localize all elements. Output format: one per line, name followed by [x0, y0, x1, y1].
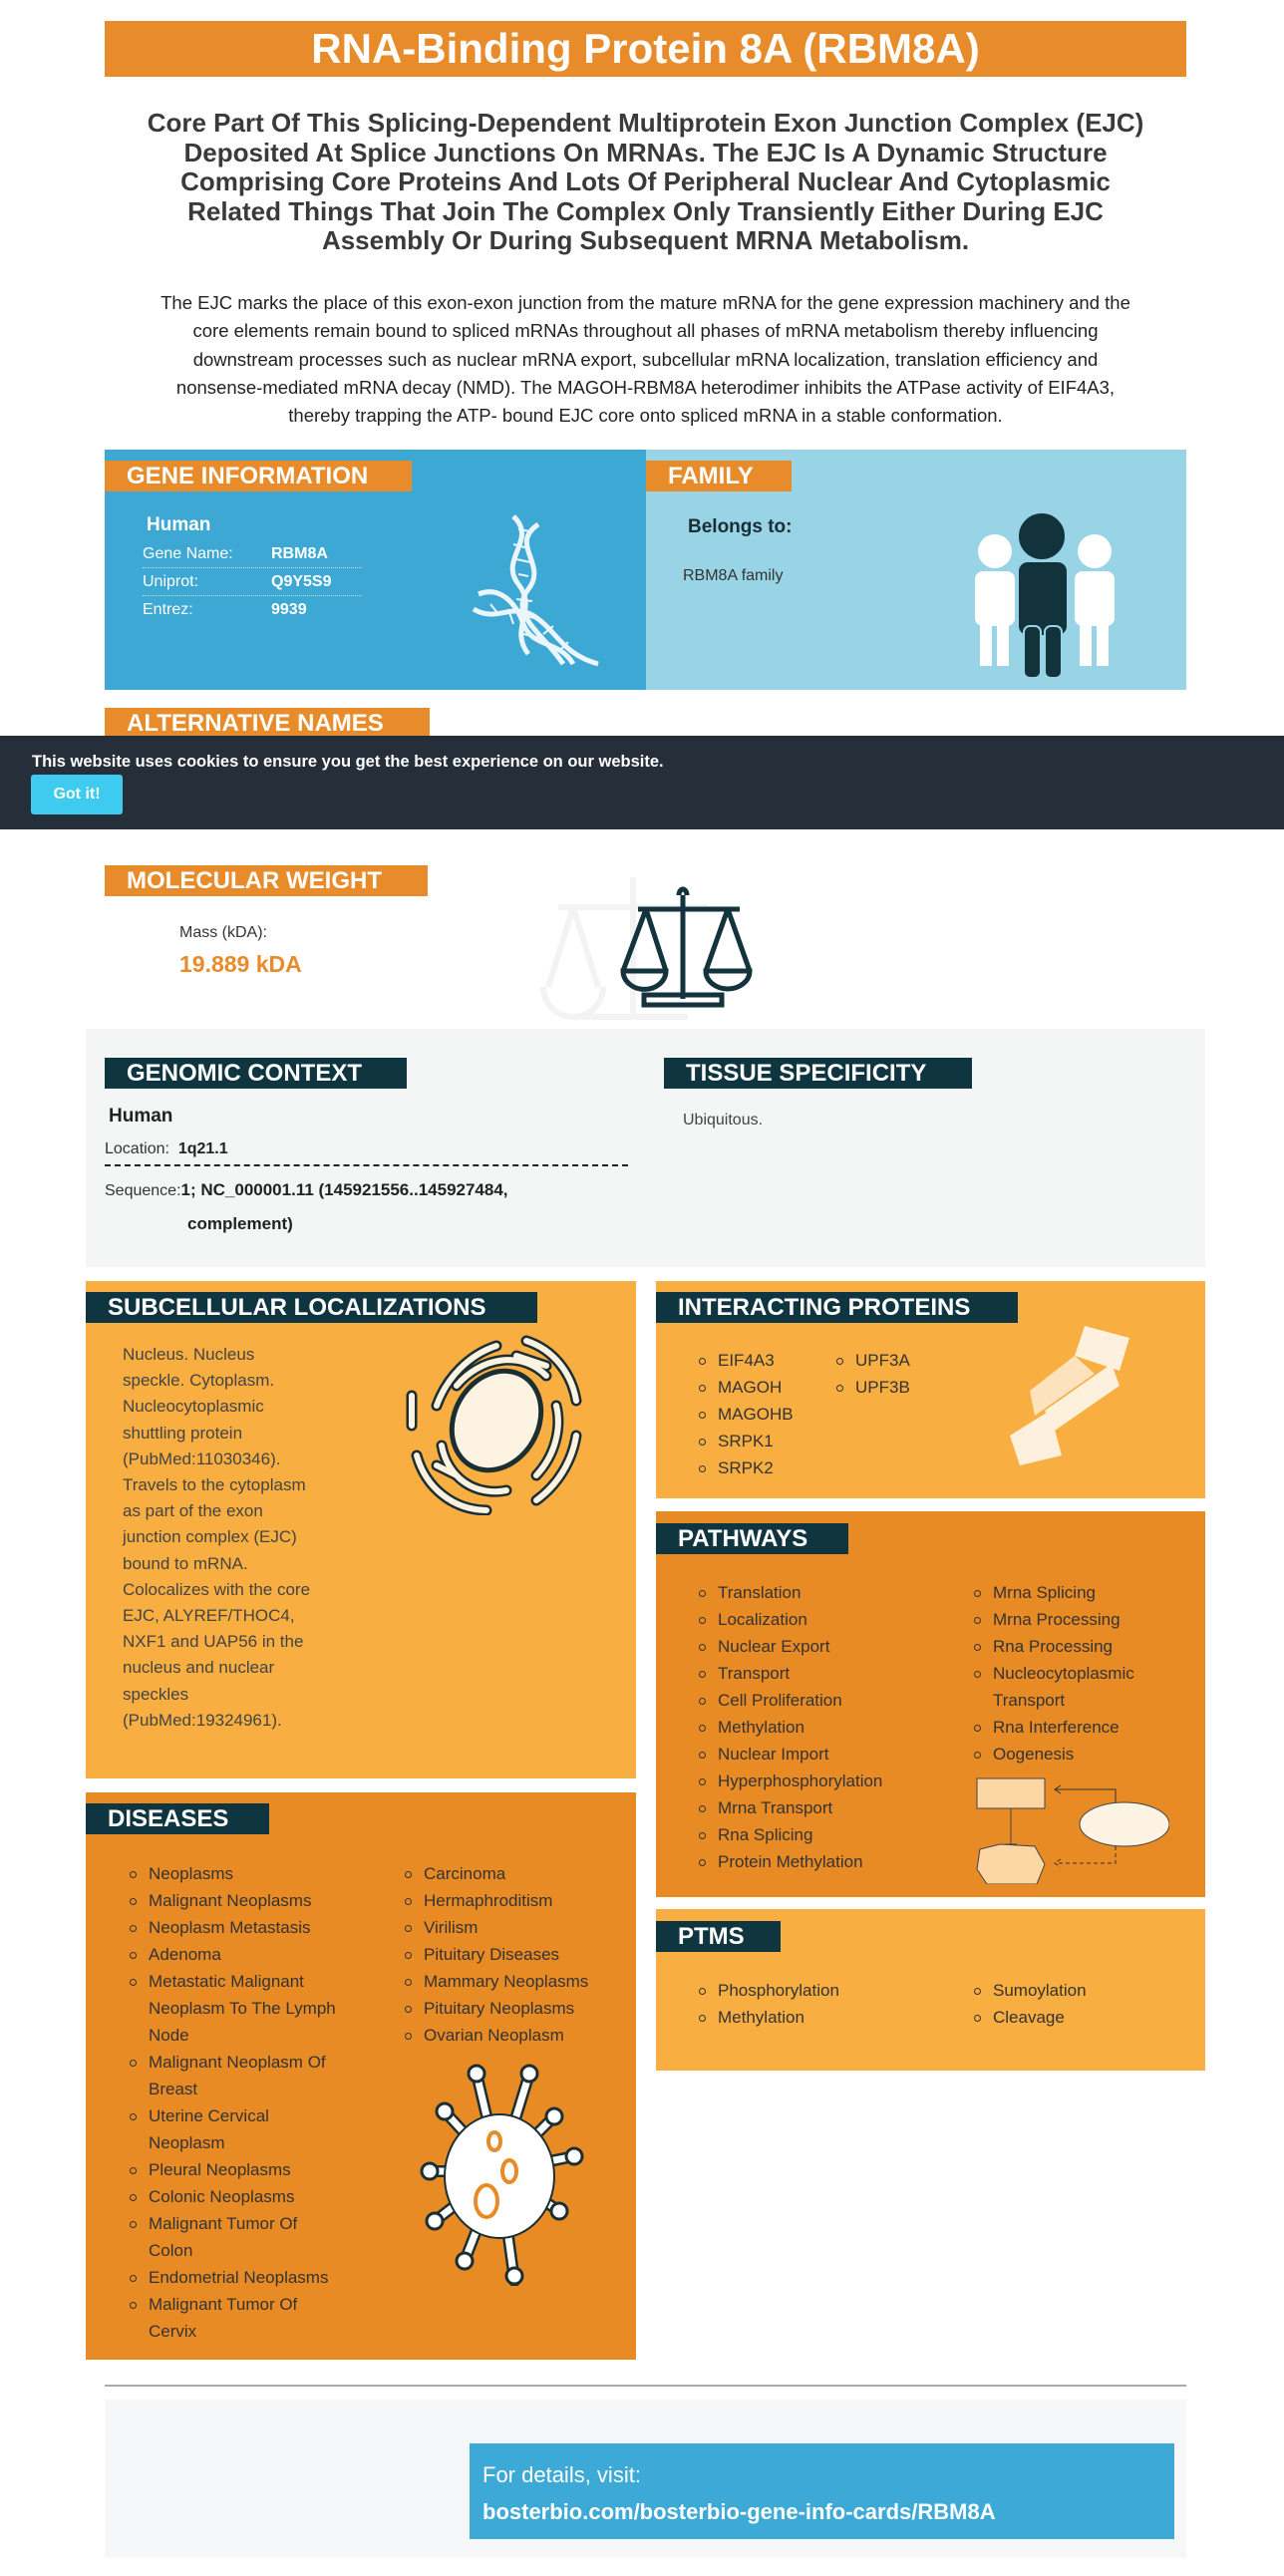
localization text — [122, 1345, 310, 1730]
mass block: 19.889 kDA — [179, 951, 302, 977]
disease list col 2: Mammary Neoplasms — [424, 1972, 588, 1991]
disease list col 1: Cervix — [149, 2322, 196, 2341]
family name: RBM8A family — [683, 567, 783, 584]
gene info table: 9939 — [271, 601, 307, 618]
genomic details: Sequence:1; NC_000001.11 (145921556..145927484, — [105, 1180, 508, 1199]
subtitle: Comprising Core Proteins And Lots Of Peripheral Nuclear And Cytoplasmic — [180, 166, 1111, 196]
protein list col 2 — [836, 1351, 910, 1397]
title — [105, 21, 1186, 77]
pathway list col 1: Cell Proliferation — [718, 1691, 842, 1710]
heading: ptms: PTMS — [678, 1923, 745, 1950]
disease list col 2: Pituitary Diseases — [424, 1945, 559, 1964]
gene info table: Q9Y5S9 — [271, 573, 331, 590]
description paragraph: thereby trapping the ATP- bound EJC core onto spliced mRNA in a stable conformation. — [288, 405, 1003, 426]
link box: For details, visit: — [482, 2462, 641, 2487]
heading: gene information — [105, 461, 412, 491]
pathway list col 2: Nucleocytoplasmic — [993, 1664, 1134, 1683]
disease list col 1: Metastatic Malignant — [149, 1972, 304, 1991]
heading: pathways — [656, 1523, 848, 1554]
description paragraph: downstream processes such as nuclear mRNA export, subcellular mRNA localization, translation efficiency and — [193, 349, 1098, 370]
footer panel — [105, 2400, 1186, 2558]
diagram: pathway — [977, 1778, 1169, 1884]
heading: alternative names — [105, 708, 430, 739]
heading: genomic context: GENOMIC CONTEXT — [127, 1060, 362, 1087]
disease list col 1: Malignant Tumor Of — [149, 2295, 297, 2314]
pathway list col 2: Transport — [993, 1691, 1065, 1710]
pathway list col 1: Methylation — [718, 1718, 804, 1737]
icon: scale — [540, 877, 752, 1020]
protein list col 1: SRPK1 — [718, 1432, 774, 1450]
heading: tissue specificity — [664, 1058, 972, 1089]
subtitle: Related Things That Join The Complex Only Transiently Either During EJC — [187, 195, 1104, 225]
pathway list col 1: Mrna Transport — [718, 1798, 832, 1817]
disease list col 1: Colonic Neoplasms — [149, 2187, 294, 2206]
pathway list col 1: Localization — [718, 1610, 807, 1629]
ptm list col 1: Methylation — [718, 2008, 804, 2027]
icon: virus — [421, 2064, 584, 2286]
gene info table: Uniprot: — [143, 573, 198, 590]
disease list col 1: Adenoma — [149, 1945, 221, 1964]
mass block: Mass (kDA): — [179, 924, 267, 941]
protein list col 1 — [699, 1351, 794, 1477]
localization text: Nucleus. Nucleus — [123, 1345, 254, 1364]
icon: helix — [1010, 1326, 1129, 1465]
pathway list col 1: Nuclear Export — [718, 1637, 829, 1656]
disease list col 1: Neoplasm Metastasis — [149, 1918, 311, 1937]
panel: family — [646, 450, 1186, 690]
localization text: speckle. Cytoplasm. — [123, 1371, 274, 1390]
disease list col 2: Virilism — [424, 1918, 478, 1937]
heading: ptms — [656, 1921, 781, 1952]
heading: tissue specificity: TISSUE SPECIFICITY — [686, 1060, 926, 1087]
pathway list col 2: Mrna Splicing — [993, 1583, 1096, 1602]
pathway list col 1: Nuclear Import — [718, 1745, 828, 1764]
genomic details — [105, 1106, 628, 1233]
disease list col 1: Malignant Neoplasm Of — [149, 2053, 326, 2072]
localization text: junction complex (EJC) — [123, 1527, 297, 1546]
heading: molecular weight — [105, 865, 428, 896]
localization text: EJC, ALYREF/THOC4, — [123, 1606, 295, 1625]
pathway list col 1 — [699, 1583, 882, 1871]
protein list col 1: MAGOHB — [718, 1405, 794, 1424]
subtitle: Assembly Or During Subsequent MRNA Metabolism. — [322, 225, 969, 255]
genomic details: complement) — [187, 1214, 293, 1233]
localization text: NXF1 and UAP56 in the — [123, 1632, 303, 1651]
pathway list col 2 — [974, 1583, 1134, 1764]
gene info table: Human — [147, 514, 210, 535]
protein list col 1: EIF4A3 — [718, 1351, 775, 1370]
button: got it — [31, 775, 123, 814]
disease list col 1: Neoplasm To The Lymph — [149, 1999, 336, 2018]
heading: diseases: DISEASES — [108, 1805, 228, 1832]
heading: pathways: PATHWAYS — [678, 1525, 807, 1552]
heading: gene information: GENE INFORMATION — [127, 463, 368, 489]
localization text: bound to mRNA. — [123, 1554, 248, 1573]
pathway list col 1: Hyperphosphorylation — [718, 1771, 882, 1790]
pathway list col 2: Oogenesis — [993, 1745, 1074, 1764]
belongs to: Belongs to: — [688, 516, 792, 537]
pathway list col 2: Rna Interference — [993, 1718, 1120, 1737]
subtitle: Deposited At Splice Junctions On MRNAs. The EJC Is A Dynamic Structure — [183, 138, 1108, 167]
pathway list col 1: Transport — [718, 1664, 790, 1683]
protein list col 2: UPF3A — [855, 1351, 910, 1370]
gene info table: Gene Name: — [143, 545, 233, 562]
ptm list col 1 — [699, 1981, 839, 2027]
description paragraph: core elements remain bound to spliced mRNAs throughout all phases of mRNA metabolism thereby influencing — [193, 320, 1099, 341]
pathway list col 1: Rna Splicing — [718, 1825, 812, 1844]
disease list col 1: Node — [149, 2026, 189, 2045]
genomic details: Human — [109, 1106, 172, 1127]
description paragraph: nonsense-mediated mRNA decay (NMD). The MAGOH-RBM8A heterodimer inhibits the ATPase activity of EIF4A3, — [176, 377, 1115, 398]
localization text: (PubMed:19324961). — [123, 1711, 282, 1730]
localization text: Colocalizes with the core — [123, 1580, 310, 1599]
mass block — [179, 924, 302, 977]
heading: molecular weight: MOLECULAR WEIGHT — [127, 867, 382, 894]
icon: cell — [407, 1336, 582, 1515]
title: RNA-Binding Protein 8A (RBM8A) — [311, 25, 980, 72]
disease list col 2: Pituitary Neoplasms — [424, 1999, 574, 2018]
disease list col 1: Neoplasms — [149, 1864, 233, 1883]
localization text: Travels to the cytoplasm — [123, 1475, 306, 1494]
icon: people — [975, 513, 1115, 677]
panel: pathways — [656, 1511, 1205, 1897]
localization text: as part of the exon — [123, 1501, 263, 1520]
disease list col 2: Carcinoma — [424, 1864, 505, 1883]
localization text: speckles — [123, 1685, 188, 1704]
panel: diseases — [86, 1792, 636, 2360]
description paragraph: The EJC marks the place of this exon-exon junction from the mature mRNA for the gene expression machinery and the — [160, 292, 1130, 313]
disease list col 2 — [405, 1864, 588, 2045]
ptm list col 2 — [974, 1981, 1087, 2027]
disease list col 1: Malignant Tumor Of — [149, 2214, 297, 2233]
protein list col 1: SRPK2 — [718, 1458, 774, 1477]
link box: bosterbio.com/bosterbio-gene-info-cards/RBM8A — [482, 2499, 996, 2524]
cookie text: This website uses cookies to ensure you get the best experience on our website. — [32, 753, 664, 771]
description paragraph — [160, 292, 1130, 426]
heading: family — [646, 461, 792, 491]
cookie banner — [0, 736, 1284, 829]
icon: DNA — [473, 514, 599, 666]
heading: diseases — [86, 1803, 269, 1834]
disease list col 1: Breast — [149, 2080, 197, 2098]
ptm list col 2: Sumoylation — [993, 1981, 1087, 2000]
disease list col 2: Ovarian Neoplasm — [424, 2026, 564, 2045]
gene info table — [143, 514, 362, 618]
panel: subcellular localizations — [86, 1281, 636, 1778]
disease list col 1: Pleural Neoplasms — [149, 2160, 291, 2179]
heading: subcellular localizations: SUBCELLULAR LOCALIZATIONS — [108, 1294, 486, 1321]
heading: family: FAMILY — [668, 463, 754, 489]
disease list col 1: Uterine Cervical — [149, 2106, 269, 2125]
gene info table: RBM8A — [271, 545, 328, 562]
localization text: Nucleocytoplasmic — [123, 1397, 264, 1416]
heading: interacting proteins: INTERACTING PROTEINS — [678, 1294, 970, 1321]
pathway list col 1: Translation — [718, 1583, 801, 1602]
subtitle: Core Part Of This Splicing-Dependent Multiprotein Exon Junction Complex (EJC) — [148, 108, 1143, 138]
disease list col 1: Endometrial Neoplasms — [149, 2268, 328, 2287]
localization text: shuttling protein — [123, 1424, 242, 1443]
ptm list col 2: Cleavage — [993, 2008, 1065, 2027]
panel: ptms — [656, 1909, 1205, 2071]
disease list col 1: Malignant Neoplasms — [149, 1891, 311, 1910]
localization text: (PubMed:11030346). — [123, 1449, 280, 1468]
subtitle — [148, 108, 1143, 255]
disease list col 1: Neoplasm — [149, 2133, 225, 2152]
link box — [470, 2443, 1174, 2539]
ptm list col 1: Phosphorylation — [718, 1981, 839, 2000]
protein list col 2: UPF3B — [855, 1378, 910, 1397]
gene info table: Entrez: — [143, 601, 193, 618]
disease list col 2: Hermaphroditism — [424, 1891, 552, 1910]
tissue text: Ubiquitous. — [683, 1112, 763, 1128]
button: got it: Got it! — [53, 786, 101, 803]
heading: genomic context — [105, 1058, 407, 1089]
heading: alternative names: ALTERNATIVE NAMES — [127, 710, 384, 737]
panel: interacting proteins — [656, 1281, 1205, 1498]
panel: gene information — [105, 450, 646, 690]
disease list col 1 — [130, 1864, 336, 2341]
protein list col 1: MAGOH — [718, 1378, 782, 1397]
genomic details: Location: 1q21.1 — [105, 1140, 228, 1157]
localization text: nucleus and nuclear — [123, 1658, 274, 1677]
disease list col 1: Colon — [149, 2241, 192, 2260]
panel: genomic context & tissue specificity — [86, 1029, 1205, 1267]
pathway list col 2: Mrna Processing — [993, 1610, 1121, 1629]
pathway list col 1: Protein Methylation — [718, 1852, 863, 1871]
pathway list col 2: Rna Processing — [993, 1637, 1113, 1656]
